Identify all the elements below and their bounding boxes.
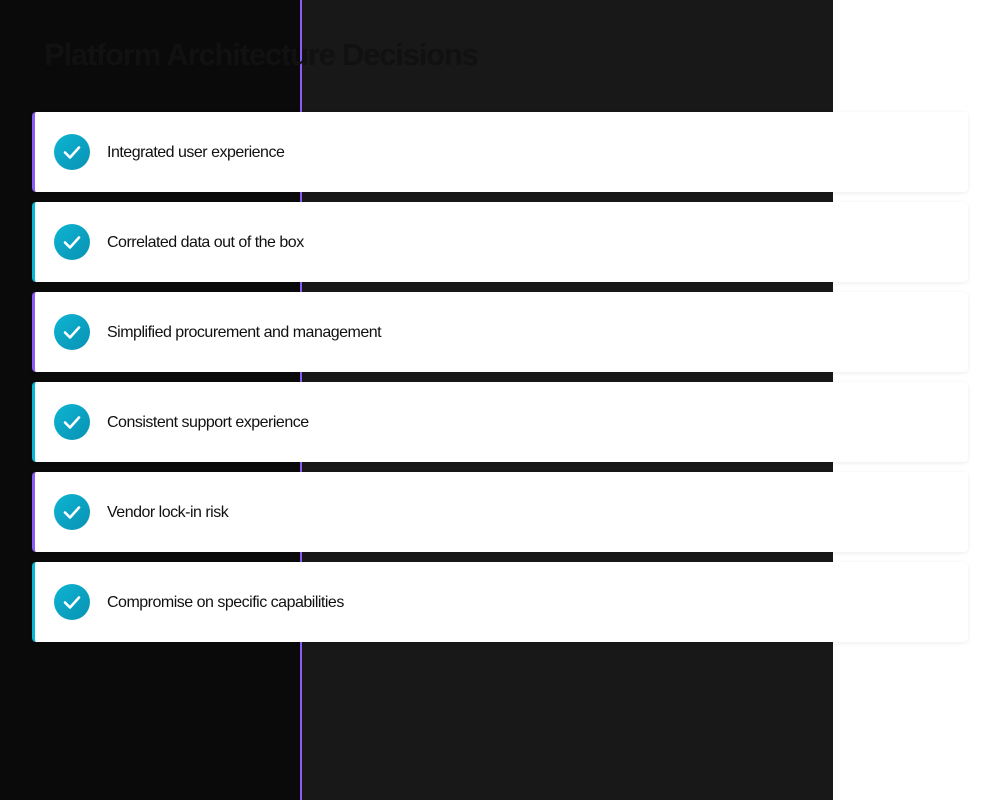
card: correlated data: Correlated data out of the box bbox=[107, 234, 304, 251]
card: simplified procurement bbox=[32, 292, 968, 372]
card: simplified procurement: Simplified procurement and management bbox=[107, 324, 381, 341]
card: compromise bbox=[32, 562, 968, 642]
card: consistent support bbox=[32, 382, 968, 462]
card: correlated data bbox=[32, 202, 968, 282]
card: vendor lock-in: Vendor lock-in risk bbox=[107, 504, 228, 521]
card: vendor lock-in bbox=[32, 472, 968, 552]
timeline line bbox=[300, 0, 302, 800]
card: integrated user experience bbox=[32, 112, 968, 192]
title: Platform Architecture Decisions bbox=[44, 37, 478, 72]
card: consistent support: Consistent support experience bbox=[107, 414, 309, 431]
card: compromise: Compromise on specific capabilities bbox=[107, 594, 344, 611]
card: integrated user experience: Integrated user experience bbox=[107, 144, 284, 161]
